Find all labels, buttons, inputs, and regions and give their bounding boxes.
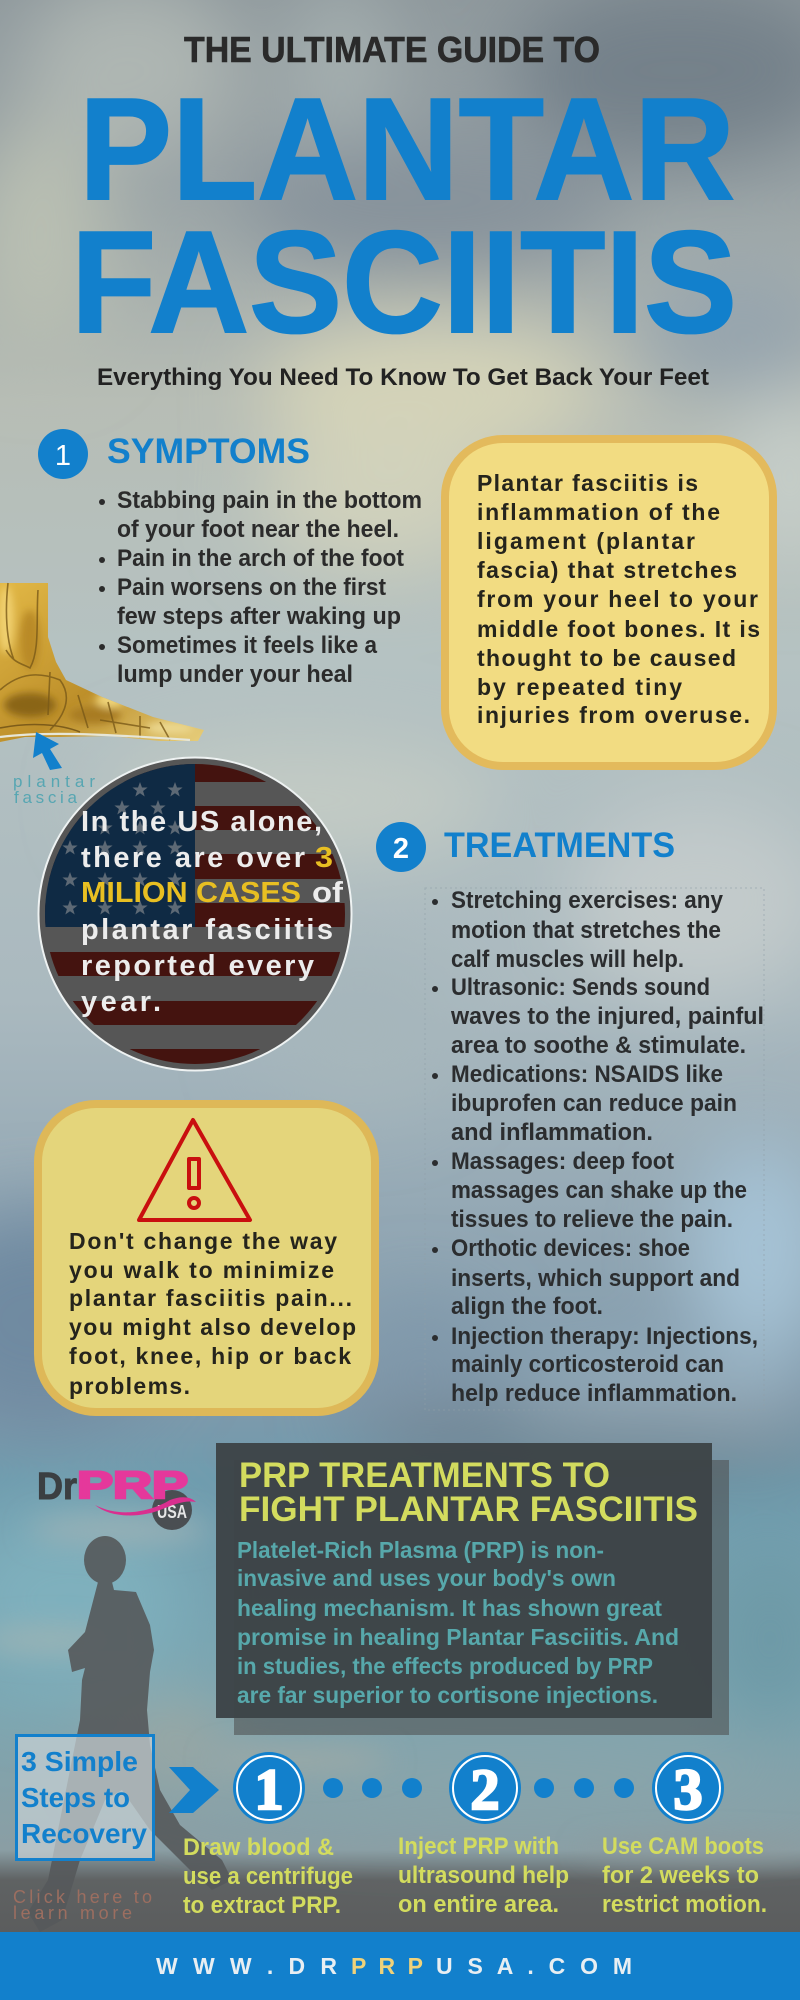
- logo swoosh: [95, 1497, 196, 1515]
- title line: the ultimate guide to: THE ULTIMATE GUIDE TO: [184, 29, 600, 70]
- symptoms list: lump under your heal: [117, 661, 353, 688]
- panel: PRP treatments: [216, 1443, 729, 1735]
- heading: symptoms: SYMPTOMS: [107, 432, 310, 471]
- definition text: thought to be caused: [477, 645, 736, 671]
- statistic text: 3: [315, 842, 333, 874]
- panel body text: promise in healing Plantar Fasciitis. And: [237, 1624, 679, 1650]
- treatments list: calf muscles will help.: [451, 946, 684, 973]
- warning text: problems.: [69, 1373, 190, 1399]
- label: plantar fascia: [13, 772, 95, 807]
- label: plantar fascia: fascia: [14, 788, 78, 807]
- click here note: [13, 1887, 152, 1923]
- logo: Dr PRP USA: [37, 1465, 196, 1530]
- step 2 text: [398, 1833, 569, 1918]
- arrow: chevron: [169, 1767, 219, 1813]
- treatments list: align the foot.: [451, 1293, 603, 1320]
- symptoms list: Sometimes it feels like a: [117, 632, 378, 659]
- panel body text: healing mechanism. It has shown great: [237, 1595, 662, 1621]
- warning text: foot, knee, hip or back: [69, 1343, 351, 1369]
- footer url: U S A . C O M: [436, 1953, 632, 1979]
- step 1 text: use a centrifuge: [183, 1863, 353, 1890]
- treatments list: help reduce inflammation.: [451, 1380, 737, 1407]
- panel body text: are far superior to cortisone injections.: [237, 1682, 658, 1708]
- treatments list: and inflammation.: [451, 1119, 653, 1146]
- symptoms list: few steps after waking up: [117, 603, 401, 630]
- subtitle: Everything You Need To Know To Get Back Your Feet: [97, 364, 709, 391]
- box: 3 simple steps to recovery: Recovery: [21, 1818, 147, 1849]
- panel heading: [239, 1456, 698, 1529]
- definition text: from your heel to your: [477, 586, 758, 612]
- definition text: ligament (plantar: [477, 528, 695, 554]
- step 2 text: ultrasound help: [398, 1862, 569, 1889]
- runner silhouette: [28, 1536, 232, 1932]
- treatments list: waves to the injured, painful: [450, 1003, 764, 1030]
- box: 3 simple steps to recovery: Steps to: [21, 1782, 130, 1813]
- definition text: fascia) that stretches: [477, 557, 737, 583]
- definition text: by repeated tiny: [477, 674, 682, 700]
- treatments list: Ultrasonic: Sends sound: [451, 974, 710, 1001]
- symptoms list: Pain in the arch of the foot: [117, 545, 404, 572]
- panel heading: PRP TREATMENTS TO: [239, 1456, 610, 1495]
- treatments list: area to soothe & stimulate.: [451, 1032, 746, 1059]
- panel: US statistics flag circle: [30, 750, 360, 1073]
- step 1 text: [183, 1834, 353, 1919]
- panel body text: Platelet-Rich Plasma (PRP) is non-: [237, 1537, 604, 1563]
- warning text: [69, 1228, 356, 1399]
- step 3 text: restrict motion.: [602, 1891, 767, 1918]
- icon: warning triangle: [139, 1120, 250, 1220]
- logo usa badge: USA: [157, 1502, 187, 1522]
- definition text: Plantar fasciitis is: [477, 470, 698, 496]
- warning text: you might also develop: [69, 1314, 356, 1340]
- warning text: plantar fasciitis pain...: [69, 1285, 352, 1311]
- definition text: injuries from overuse.: [477, 702, 750, 728]
- treatments list: Massages: deep foot: [451, 1148, 674, 1175]
- number badge 1: [38, 429, 88, 479]
- number badge 1: 1: [55, 440, 71, 472]
- footer url: [156, 1953, 632, 1979]
- warning box: [38, 1104, 375, 1412]
- treatments list: tissues to relieve the pain.: [451, 1206, 733, 1233]
- panel shadow: [234, 1460, 729, 1735]
- number badge 2: [376, 822, 426, 872]
- logo usa badge: [152, 1490, 192, 1530]
- panel box: [216, 1443, 712, 1718]
- step 2 text: Inject PRP with: [398, 1833, 559, 1860]
- symptoms list: of your foot near the heel.: [117, 516, 399, 543]
- step 2 badge: [449, 1752, 521, 1824]
- statistic text: reported every: [81, 950, 314, 982]
- flag image: [30, 750, 360, 1073]
- step 3 badge: 3: [674, 1757, 702, 1822]
- step 3 text: [602, 1833, 767, 1918]
- treatments list: mainly corticosteroid can: [451, 1351, 724, 1378]
- logo word Dr: Dr: [37, 1466, 77, 1508]
- panel: treatments: [376, 822, 764, 1410]
- definition text: [477, 470, 760, 728]
- panel body text: invasive and uses your body's own: [237, 1565, 616, 1591]
- treatments list: Injection therapy: Injections,: [451, 1323, 758, 1350]
- panel: definition callout: [445, 439, 773, 766]
- footer url: P R P: [351, 1953, 423, 1979]
- step 3 text: Use CAM boots: [602, 1833, 764, 1860]
- title word: fasciitis: FASCIITIS: [71, 201, 737, 363]
- warning text: you walk to minimize: [69, 1257, 334, 1283]
- footer url: W W W . D R: [156, 1953, 337, 1979]
- statistic text: MILION CASES: [81, 877, 301, 909]
- arrow: points at plantar fascia: [33, 732, 62, 770]
- heading: treatments: TREATMENTS: [444, 826, 675, 865]
- statistic text: plantar fasciitis: [81, 914, 333, 946]
- symptoms list: Stabbing pain in the bottom: [117, 487, 422, 514]
- statistic text: In the US alone,: [81, 806, 322, 838]
- statistic text: year.: [81, 986, 161, 1018]
- step 1 text: Draw blood &: [183, 1834, 334, 1861]
- statistic text: there are over: [81, 842, 305, 874]
- treatments list: motion that stretches the: [451, 917, 721, 944]
- label: plantar fascia: plantar: [13, 772, 95, 791]
- step 1 badge: 1: [254, 1757, 284, 1822]
- panel: symptoms: [38, 429, 422, 688]
- callout box: [445, 439, 773, 766]
- logo word PRP: PRP: [77, 1465, 188, 1507]
- treatments list: Orthotic devices: shoe: [451, 1235, 690, 1262]
- step 2 badge: 2: [470, 1757, 500, 1822]
- number badge 2: 2: [393, 833, 409, 865]
- click here note: learn more: [13, 1903, 132, 1923]
- treatments list: [425, 887, 764, 1410]
- title: [71, 29, 737, 391]
- step 3 text: for 2 weeks to: [602, 1862, 759, 1889]
- step 3 badge: [652, 1752, 724, 1824]
- box: 3 simple steps to recovery: [16, 1736, 154, 1860]
- icon: golden foot anatomy: [0, 583, 210, 743]
- step 1 text: to extract PRP.: [183, 1892, 341, 1919]
- symptoms list: [99, 487, 422, 688]
- panel heading: FIGHT PLANTAR FASCIITIS: [239, 1490, 698, 1529]
- treatments list: Stretching exercises: any: [451, 887, 724, 914]
- step 2 text: on entire area.: [398, 1891, 559, 1918]
- warning text: Don't change the way: [69, 1228, 337, 1254]
- definition text: middle foot bones. It is: [477, 616, 760, 642]
- statistic text: [81, 806, 343, 1018]
- footer bar: [0, 1932, 800, 2000]
- definition text: inflammation of the: [477, 499, 720, 525]
- panel body text: [237, 1537, 679, 1708]
- treatments list: inserts, which support and: [451, 1265, 740, 1292]
- treatments list: Medications: NSAIDS like: [451, 1061, 723, 1088]
- connector dots 1 to 2: [323, 1778, 422, 1798]
- title word: plantar: PLANTAR: [79, 68, 735, 230]
- statistic text: of: [312, 877, 343, 909]
- box: 3 simple steps to recovery: 3 Simple: [21, 1746, 138, 1777]
- panel: warning callout: [38, 1104, 375, 1412]
- click here note: Click here to: [13, 1887, 152, 1907]
- symptoms list: Pain worsens on the first: [117, 574, 386, 601]
- treatments list: massages can shake up the: [451, 1177, 747, 1204]
- step 1 badge: [233, 1752, 305, 1824]
- connector dots 2 to 3: [534, 1778, 634, 1798]
- panel body text: in studies, the effects produced by PRP: [237, 1653, 653, 1679]
- treatments list: ibuprofen can reduce pain: [451, 1090, 737, 1117]
